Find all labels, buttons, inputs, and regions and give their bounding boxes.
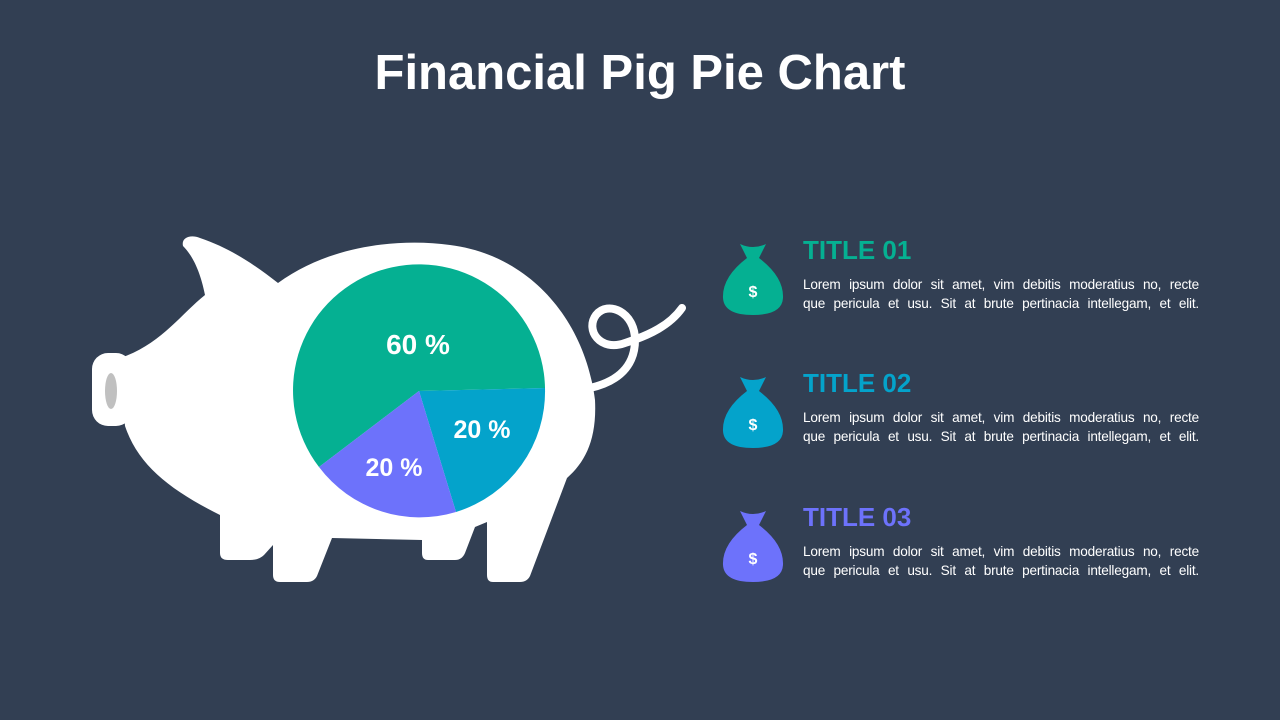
icon: money bag: $ [749, 417, 758, 434]
item 3: TITLE 03 [803, 502, 911, 532]
icon: money bag: $ [749, 284, 758, 301]
item 2 [722, 368, 1199, 448]
item 1: que pericula et usu. Sit at brute pertinacia intellegam, et elit. [803, 296, 1199, 311]
icon: money bag [723, 244, 783, 315]
pie chart [293, 264, 545, 517]
tail [590, 308, 682, 388]
item 2: Lorem ipsum dolor sit amet, vim debitis moderatius no, recte [803, 410, 1199, 425]
pig pie chart [92, 236, 686, 582]
pie chart: 60 % [386, 329, 450, 360]
item 2: que pericula et usu. Sit at brute pertinacia intellegam, et elit. [803, 429, 1199, 444]
item 3 [722, 502, 1199, 582]
icon: money bag [722, 511, 784, 582]
pie chart: 20 % [366, 454, 422, 482]
item 3: Lorem ipsum dolor sit amet, vim debitis moderatius no, recte [803, 544, 1199, 559]
pig body [92, 236, 595, 582]
item 1: Lorem ipsum dolor sit amet, vim debitis moderatius no, recte [803, 277, 1199, 292]
pie chart: 20 % [454, 416, 510, 444]
item 2: TITLE 02 [803, 368, 911, 398]
icon: money bag: $ [749, 551, 758, 568]
item 1 [723, 235, 1199, 315]
title: Financial Pig Pie Chart [375, 46, 905, 100]
icon: money bag [722, 377, 783, 448]
nostril [105, 373, 117, 409]
item 1: TITLE 01 [803, 235, 911, 265]
item 3: que pericula et usu. Sit at brute pertinacia intellegam, et elit. [803, 563, 1199, 578]
